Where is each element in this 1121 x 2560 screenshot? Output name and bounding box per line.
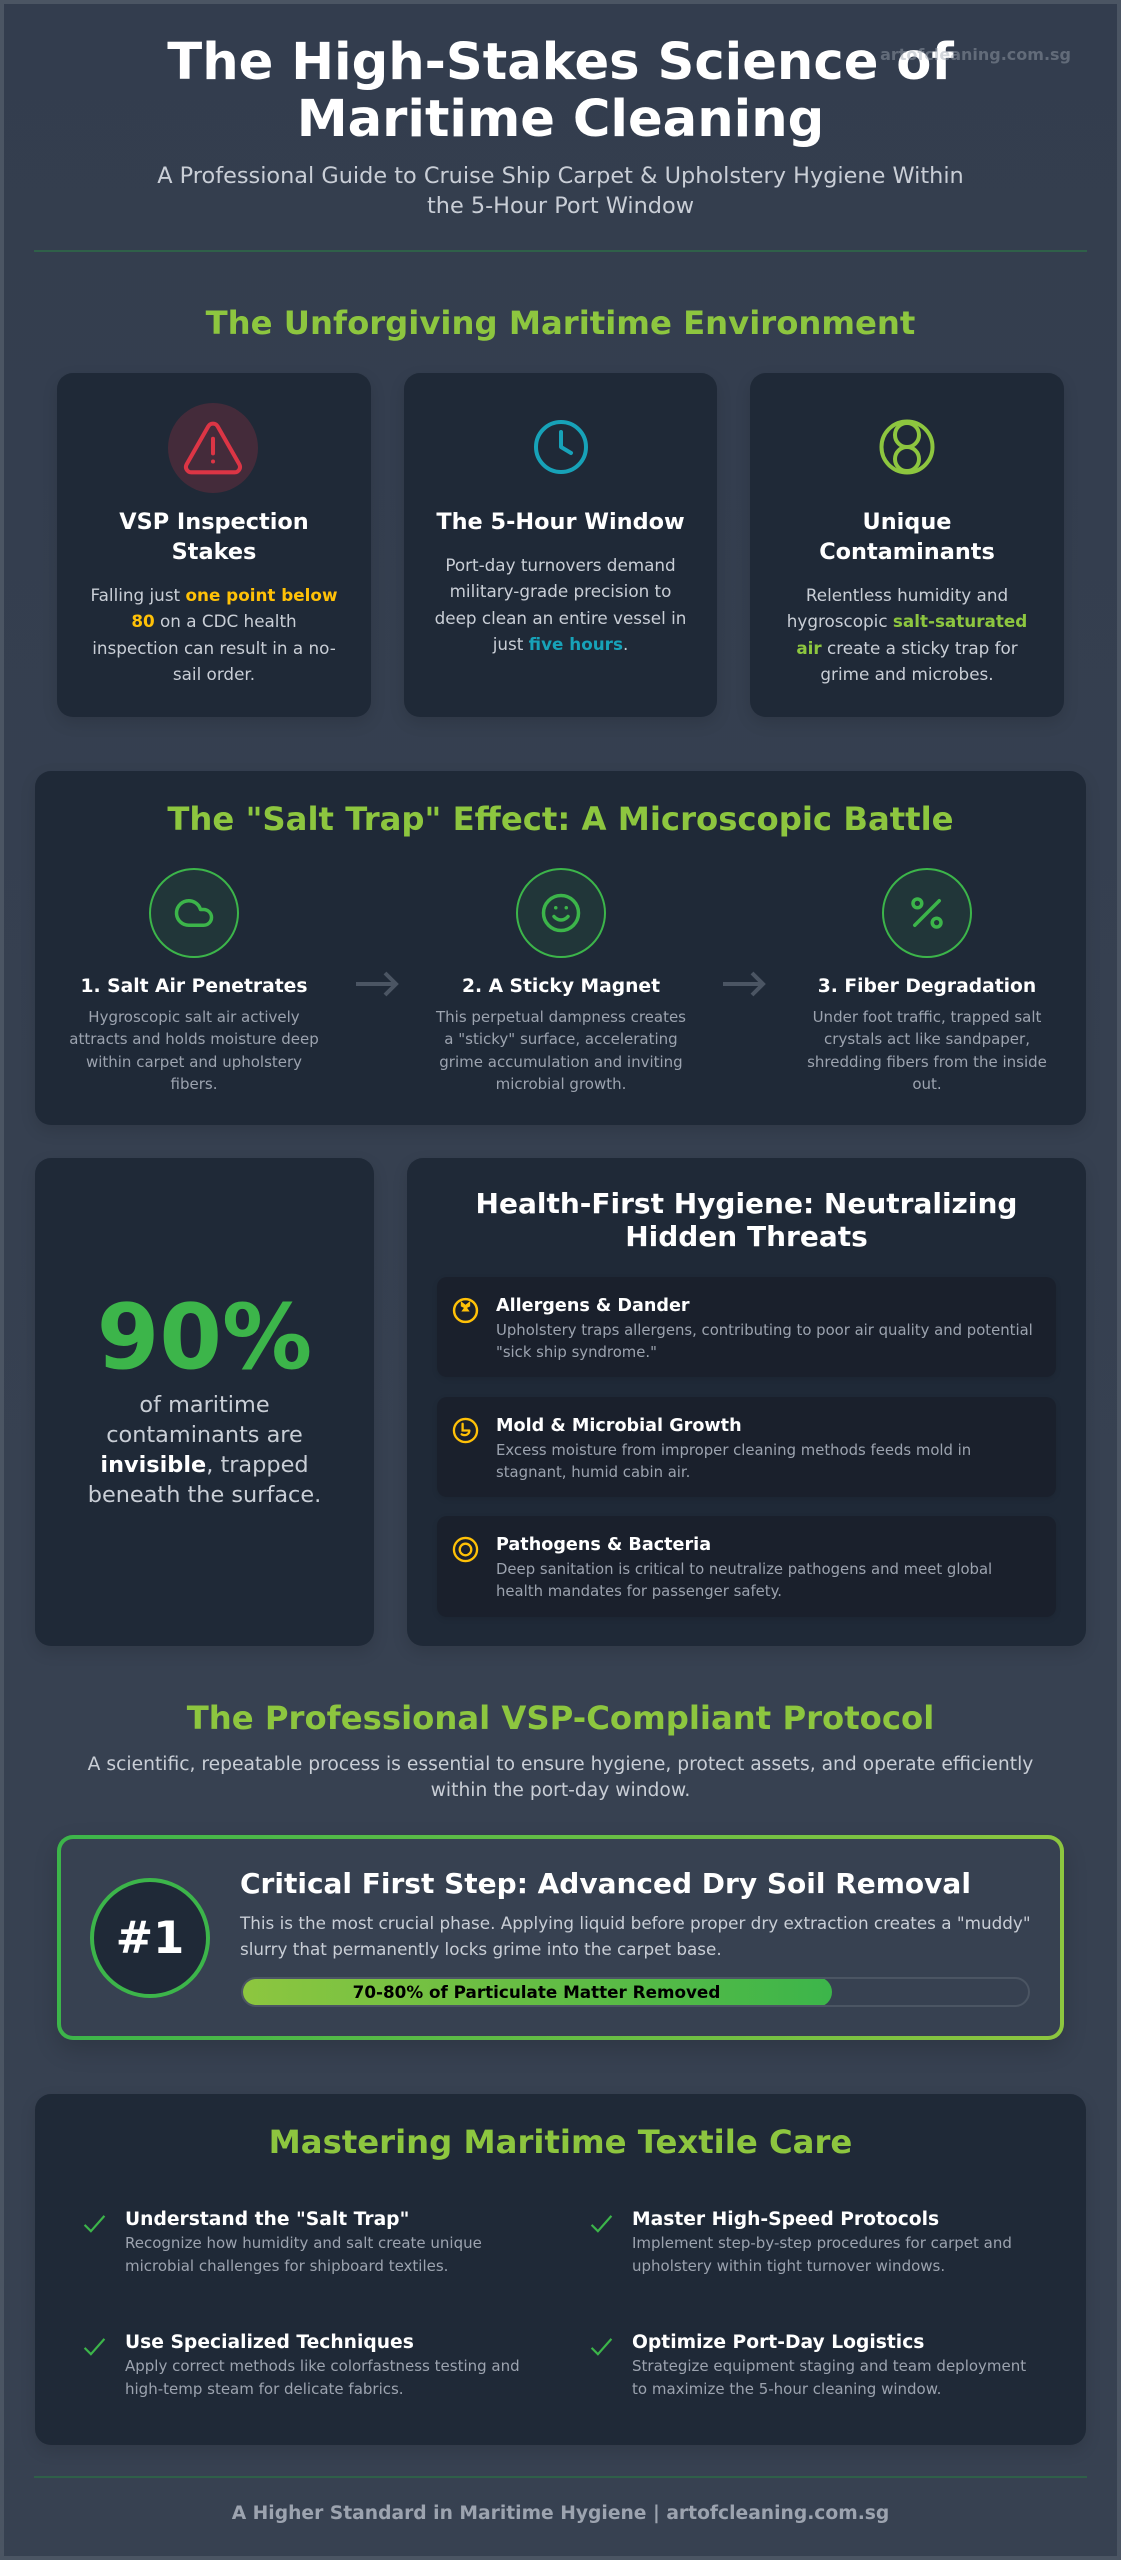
- item title: Master High-Speed Protocols: [632, 2209, 939, 2230]
- threat text: [496, 1321, 1033, 1361]
- card title: Contaminants: [819, 539, 995, 565]
- icon: check: [590, 2215, 612, 2233]
- threat text: Deep sanitation is critical to neutralize pathogens and meet global: [496, 1560, 992, 1578]
- item text: Recognize how humidity and salt create unique: [125, 2234, 482, 2252]
- item: logistics: [590, 2332, 1026, 2398]
- panel: mastering textile care: [35, 2094, 1086, 2445]
- heading: environment: The Unforgiving Maritime Environment: [206, 304, 915, 342]
- card title: [119, 509, 309, 565]
- threat title: Pathogens & Bacteria: [496, 1535, 711, 1555]
- item text: high-temp steam for delicate fabrics.: [125, 2380, 404, 2398]
- heading: mastering: Mastering Maritime Textile Care: [269, 2123, 852, 2161]
- step 1 text: fibers.: [171, 1075, 217, 1093]
- item: techniques: [84, 2332, 520, 2398]
- progress bar: [241, 1977, 1030, 2007]
- icon: clock: [534, 420, 588, 474]
- card title: VSP Inspection: [119, 509, 309, 535]
- panel: unique contaminants: [750, 373, 1064, 717]
- icon: percent: [882, 868, 972, 958]
- threat text: Excess moisture from improper cleaning methods feeds mold in: [496, 1441, 971, 1459]
- step 3 title: 3. Fiber Degradation: [818, 976, 1036, 997]
- item title: Optimize Port-Day Logistics: [632, 2332, 924, 2353]
- card text: sail order.: [173, 664, 255, 684]
- threat text: "sick ship syndrome.": [496, 1343, 657, 1361]
- callout: critical first step: [57, 1835, 1064, 2040]
- stat text: [88, 1392, 321, 1508]
- heading: salt trap: The "Salt Trap" Effect: A Microscopic Battle: [167, 800, 954, 838]
- item text: [632, 2234, 1012, 2275]
- item: understand: [84, 2209, 482, 2275]
- heading: protocol: The Professional VSP-Compliant Protocol: [187, 1699, 934, 1737]
- threat: mold: [437, 1397, 1056, 1497]
- item text: to maximize the 5-hour cleaning window.: [632, 2380, 941, 2398]
- icon: contaminants: [880, 420, 934, 474]
- item text: [125, 2234, 482, 2275]
- icon: cloud: [149, 868, 239, 958]
- threat text: [496, 1560, 992, 1600]
- step 2 text: a "sticky" surface, accelerating: [444, 1030, 678, 1048]
- card text: Relentless humidity and: [806, 585, 1008, 605]
- item text: upholstery within tight turnover windows.: [632, 2257, 945, 2275]
- panel: salt trap: [35, 771, 1086, 1125]
- title: Maritime Cleaning: [297, 89, 824, 149]
- icon: pathogens: [452, 1536, 478, 1562]
- title: [167, 32, 954, 149]
- item text: Strategize equipment staging and team deployment: [632, 2357, 1026, 2375]
- step 3 text: crystals act like sandpaper,: [824, 1030, 1030, 1048]
- panel: health-first hygiene: [407, 1158, 1086, 1646]
- callout text: slurry that permanently locks grime into the carpet base.: [240, 1939, 722, 1959]
- item text: Implement step-by-step procedures for carpet and: [632, 2234, 1012, 2252]
- callout text: [240, 1913, 1031, 1959]
- progress fill: 70-80% of Particulate Matter Removed: [353, 1982, 720, 2002]
- item text: microbial challenges for shipboard textiles.: [125, 2257, 448, 2275]
- card text: hygroscopic salt-saturated: [787, 611, 1027, 631]
- item: master: [590, 2209, 1012, 2275]
- card text: 80 on a CDC health: [131, 611, 297, 631]
- stat text: invisible, trapped: [100, 1452, 309, 1478]
- step 3 text: [807, 1008, 1047, 1093]
- step 1 title: 1. Salt Air Penetrates: [81, 976, 307, 997]
- arrow 2: [723, 972, 766, 996]
- icon: allergens: [452, 1298, 478, 1324]
- icon: check: [84, 2215, 106, 2233]
- protocol intro: A scientific, repeatable process is essential to ensure hygiene, protect assets, and operate efficiently: [88, 1754, 1033, 1775]
- icon: warning triangle: [168, 403, 258, 493]
- step 1 text: [69, 1008, 319, 1093]
- card text: air create a sticky trap for: [796, 638, 1018, 658]
- heading: health-first: [476, 1187, 1017, 1253]
- card text: Port-day turnovers demand: [445, 555, 676, 575]
- big number: 90%: [97, 1285, 312, 1390]
- subtitle: A Professional Guide to Cruise Ship Carpet & Upholstery Hygiene Within: [157, 163, 964, 189]
- threat text: [496, 1441, 971, 1481]
- card text: [91, 585, 337, 684]
- card title: The 5-Hour Window: [436, 509, 685, 535]
- icon: check: [590, 2338, 612, 2356]
- step 1 text: within carpet and upholstery: [86, 1053, 302, 1071]
- icon: check: [84, 2338, 106, 2356]
- item title: Use Specialized Techniques: [125, 2332, 414, 2353]
- step 3 text: shredding fibers from the inside: [807, 1053, 1047, 1071]
- card title: Unique: [863, 509, 951, 535]
- item text: Apply correct methods like colorfastness testing and: [125, 2357, 520, 2375]
- protocol intro: [88, 1754, 1033, 1801]
- card text: deep clean an entire vessel in: [435, 608, 686, 628]
- card text: military-grade precision to: [450, 581, 671, 601]
- step 2 title: 2. A Sticky Magnet: [462, 976, 660, 997]
- threat: allergens: [437, 1277, 1056, 1377]
- callout heading: Critical First Step: Advanced Dry Soil Removal: [240, 1867, 971, 1900]
- step 3 text: Under foot traffic, trapped salt: [813, 1008, 1041, 1026]
- title: The High-Stakes Science of: [167, 32, 954, 92]
- badge: #1: [90, 1878, 210, 1998]
- threat title: Mold & Microbial Growth: [496, 1416, 742, 1436]
- callout text: This is the most crucial phase. Applying liquid before proper dry extraction creates a "muddy": [240, 1913, 1031, 1933]
- footer: A Higher Standard in Maritime Hygiene | artofcleaning.com.sg: [232, 2503, 889, 2524]
- protocol intro: within the port-day window.: [431, 1780, 690, 1801]
- panel: 5-hour window: [404, 373, 717, 717]
- card text: grime and microbes.: [820, 664, 994, 684]
- stat text: of maritime: [139, 1392, 270, 1418]
- panel: VSP inspection stakes: [57, 373, 371, 717]
- threat: pathogens: [437, 1516, 1056, 1617]
- icon: smile: [516, 868, 606, 958]
- stat text: beneath the surface.: [88, 1482, 321, 1508]
- card text: Falling just one point below: [91, 585, 337, 605]
- watermark: artofcleaning.com.sg: [880, 45, 1071, 64]
- step 3 text: out.: [912, 1075, 942, 1093]
- step 1 text: attracts and holds moisture deep: [69, 1030, 319, 1048]
- threat title: Allergens & Dander: [496, 1296, 690, 1316]
- card title: [819, 509, 995, 565]
- card text: inspection can result in a no-: [92, 638, 336, 658]
- heading: health-first: Health-First Hygiene: Neutralizing: [476, 1187, 1017, 1220]
- arrow 1: [356, 972, 399, 996]
- progress fill: [241, 1977, 832, 2007]
- panel: 90 percent stat: [35, 1158, 374, 1646]
- badge: #1: #1: [116, 1911, 184, 1964]
- icon: mold: [452, 1418, 478, 1444]
- item text: [125, 2357, 520, 2398]
- threat text: health mandates for passenger safety.: [496, 1582, 782, 1600]
- card text: [787, 585, 1027, 684]
- step 2 text: This perpetual dampness creates: [436, 1008, 686, 1026]
- stat text: contaminants are: [106, 1422, 303, 1448]
- step 2 text: microbial growth.: [496, 1075, 626, 1093]
- threat text: Upholstery traps allergens, contributing to poor air quality and potential: [496, 1321, 1033, 1339]
- card text: just five hours.: [493, 634, 628, 654]
- heading: health-first: Hidden Threats: [625, 1220, 868, 1253]
- subtitle: the 5-Hour Port Window: [427, 193, 694, 219]
- card text: [435, 555, 686, 654]
- step 2 text: grime accumulation and inviting: [439, 1053, 683, 1071]
- step 2 text: [436, 1008, 686, 1093]
- card title: Stakes: [172, 539, 256, 565]
- threat text: stagnant, humid cabin air.: [496, 1463, 690, 1481]
- step 1 text: Hygroscopic salt air actively: [88, 1008, 300, 1026]
- item title: Understand the "Salt Trap": [125, 2209, 409, 2230]
- item text: [632, 2357, 1026, 2398]
- subtitle: [157, 163, 964, 219]
